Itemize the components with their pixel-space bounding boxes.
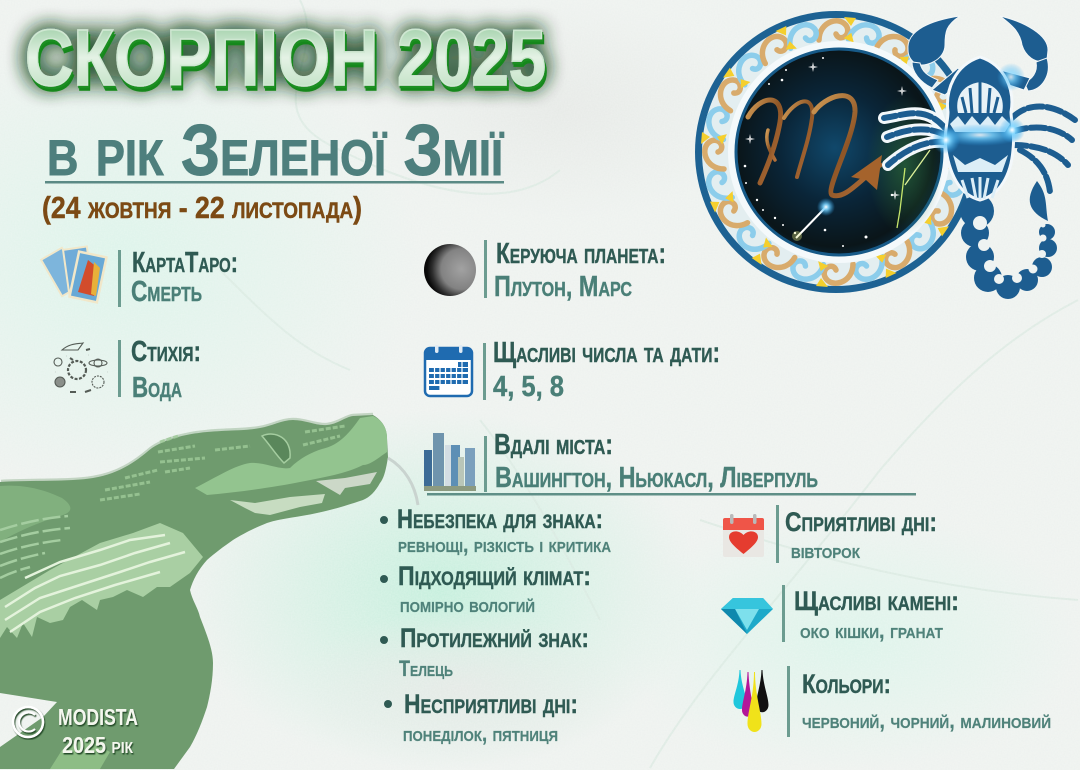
scorpio glyph bbox=[748, 96, 882, 196]
value: 4, 5, 8 bbox=[493, 371, 564, 403]
value: око кішки, гранат bbox=[800, 618, 943, 643]
icon: tarot cards bbox=[41, 247, 106, 302]
snake illustration bbox=[0, 414, 418, 769]
heading: Щасливі числа та дати: bbox=[493, 337, 720, 369]
info: ruling planet bbox=[424, 238, 666, 303]
snake back highlight bbox=[0, 486, 70, 542]
heading: Несприятливі дні: bbox=[404, 689, 578, 719]
icon: cosmic doodle bbox=[54, 343, 107, 392]
snake side streaks bbox=[0, 516, 70, 578]
divider bbox=[118, 250, 121, 307]
info: colours bbox=[734, 666, 1051, 737]
list: climate bbox=[380, 561, 591, 617]
icon: diamond bbox=[721, 598, 773, 634]
value: Вода bbox=[132, 372, 182, 404]
heading: Підходящий клімат: bbox=[398, 561, 591, 591]
bullet bbox=[384, 700, 392, 708]
snake head highlight bbox=[195, 416, 387, 495]
value: вівторок bbox=[791, 538, 861, 563]
list: unfavourable days bbox=[384, 689, 578, 746]
bullet bbox=[380, 516, 388, 524]
snake tongue bbox=[388, 458, 418, 505]
snake belly stripes bbox=[5, 535, 185, 632]
scorpion tail bbox=[960, 181, 1057, 299]
scorpion body bbox=[945, 57, 1014, 200]
bullet bbox=[380, 575, 388, 583]
icon: heart calendar bbox=[723, 514, 764, 557]
scorpion legs left inner bbox=[884, 113, 945, 165]
snake eye bbox=[262, 434, 290, 463]
scorpion glow bbox=[932, 63, 1025, 154]
list: danger bbox=[380, 504, 611, 557]
value: червоний, чорний, малиновий bbox=[802, 708, 1051, 733]
constellation glow bbox=[792, 150, 930, 241]
value: понеділок, пятниця bbox=[403, 721, 558, 746]
white ring and night sky bbox=[728, 41, 950, 263]
icon: copyright bbox=[13, 707, 43, 737]
heading: Вдалі міста: bbox=[494, 429, 613, 461]
scorpion claws bbox=[908, 16, 1048, 95]
copyright mark bbox=[13, 704, 138, 758]
icon: moon bbox=[424, 244, 476, 296]
value: Смерть bbox=[131, 276, 202, 308]
info: favourable days bbox=[723, 505, 937, 563]
list: opposite sign bbox=[380, 623, 589, 681]
snake lower body bbox=[50, 738, 110, 769]
heading: Щасливі камені: bbox=[794, 586, 959, 616]
heading: Небезпека для знака: bbox=[397, 504, 603, 534]
icon: calendar bbox=[425, 345, 472, 396]
year: 2025 рік bbox=[62, 732, 133, 758]
scorpion legs left halo bbox=[884, 113, 945, 165]
icon: ink drops bbox=[734, 670, 768, 732]
author: MODISTA bbox=[58, 704, 138, 730]
scorpion legs right bbox=[1012, 106, 1075, 192]
stars bbox=[744, 57, 907, 247]
dates: (24 жовтня - 22 листопада) bbox=[42, 190, 362, 225]
divider bbox=[782, 585, 785, 642]
icon: skyscrapers bbox=[424, 433, 476, 491]
value: ревнощі, різкість і критика bbox=[398, 532, 611, 557]
heading: Керуюча планета: bbox=[496, 238, 666, 270]
divider bbox=[484, 436, 487, 492]
divider bbox=[483, 343, 486, 400]
snake soft top edge bbox=[1, 414, 373, 481]
info: cities bbox=[424, 429, 818, 494]
heading: Стихія: bbox=[131, 336, 201, 368]
scorpion tail highlights bbox=[973, 216, 1046, 284]
value: Вашингтон, Ньюкасл, Ліверпуль bbox=[495, 462, 818, 494]
value: Телець bbox=[399, 656, 453, 681]
heading: Сприятливі дні: bbox=[785, 507, 937, 537]
info: lucky stones bbox=[721, 585, 959, 643]
section rule bbox=[427, 493, 916, 496]
snake mouth bbox=[230, 472, 377, 515]
divider bbox=[118, 340, 121, 397]
subtitle underline bbox=[45, 181, 504, 184]
divider bbox=[787, 666, 790, 737]
bullet bbox=[380, 636, 388, 644]
info: element bbox=[54, 336, 201, 404]
info: tarot bbox=[41, 247, 238, 308]
snake neck speckles bbox=[100, 426, 345, 500]
info: lucky numbers bbox=[425, 337, 720, 403]
value: Плутон, Марс bbox=[494, 271, 632, 303]
divider bbox=[484, 240, 487, 298]
value: помірно вологий bbox=[400, 592, 535, 617]
heading: КартаТаро: bbox=[132, 247, 238, 279]
title: СКОРПІОН 2025 bbox=[25, 13, 546, 102]
scorpion bbox=[884, 16, 1075, 299]
heading: Кольори: bbox=[802, 669, 891, 699]
ornamental ring bbox=[695, 11, 977, 293]
zodiac medallion bbox=[695, 11, 1075, 299]
divider bbox=[776, 505, 779, 563]
heading: Протилежний знак: bbox=[400, 623, 589, 653]
subtitle: в рік Зеленої Змії bbox=[47, 111, 504, 191]
snake belly scales bbox=[0, 523, 203, 638]
